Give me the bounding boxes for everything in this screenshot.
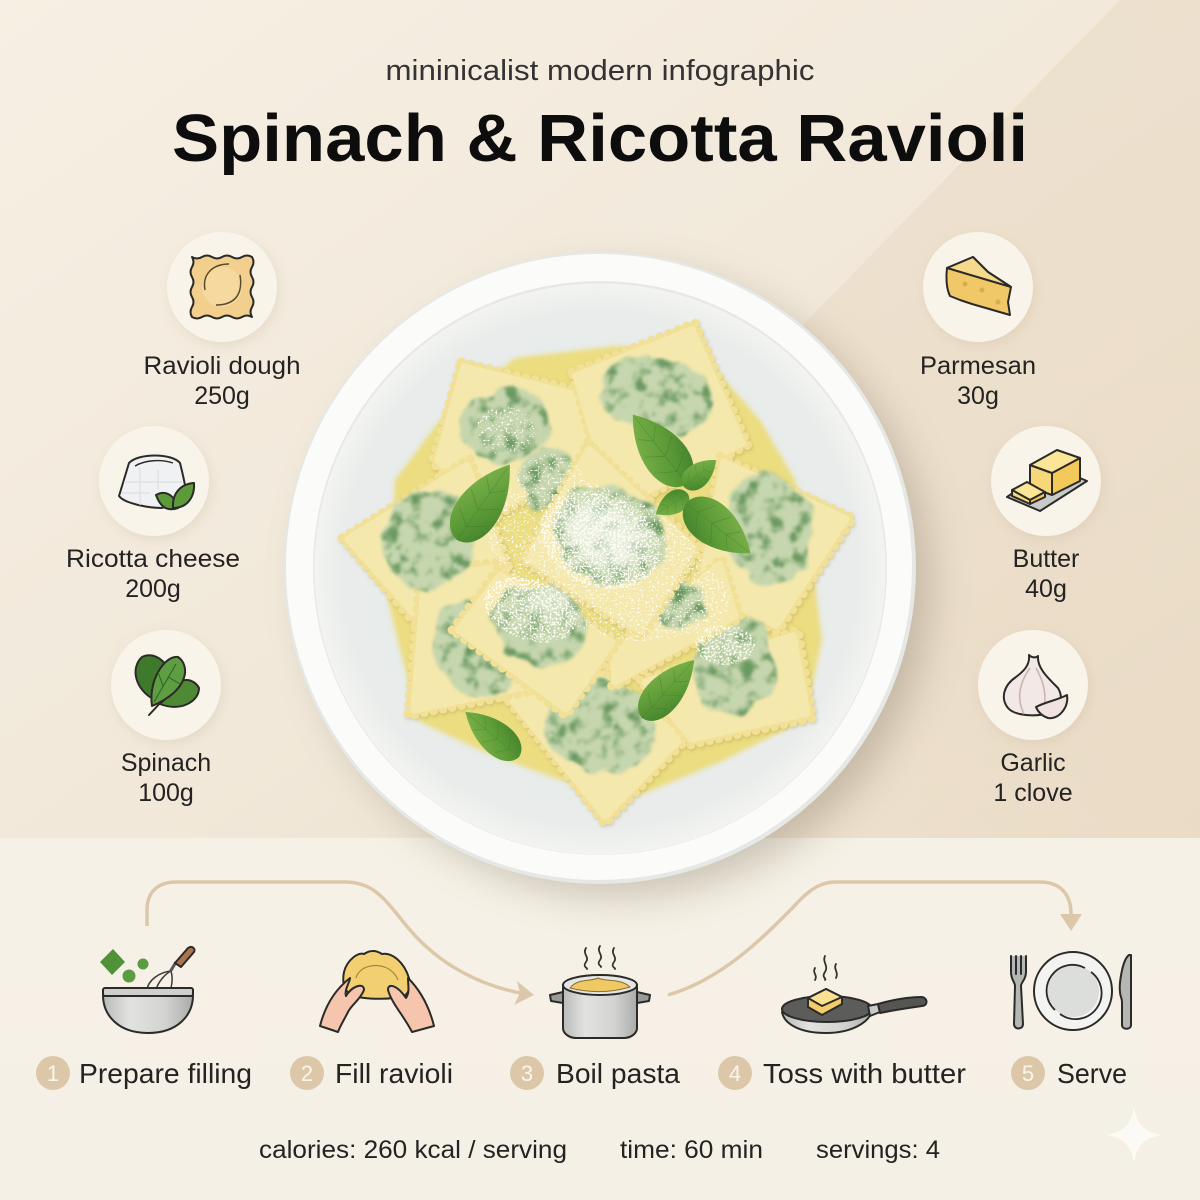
ingredient: butter: 40g [1025,575,1067,603]
step 5: serve [1011,952,1131,1090]
label: prepare filling: Prepare filling [79,1058,252,1089]
badge: 3: 3 [521,1061,533,1086]
icon: bowl and whisk [100,947,195,1033]
label: ravioli dough: Ravioli dough [144,352,300,380]
label: parmesan: Parmesan [920,352,1036,380]
ingredient: garlic [978,630,1088,807]
ingredient: spinach: 100g [138,779,194,807]
badge: 1: 1 [47,1061,59,1086]
badge: 2 [290,1056,324,1090]
icon: pot with steam [550,946,650,1038]
label: butter: Butter [1013,545,1079,573]
icon: garlic bulb [1004,655,1067,718]
label: fill ravioli: Fill ravioli [335,1058,453,1089]
step 4: toss with butter [718,956,966,1090]
ingredient: parmesan [920,232,1036,410]
icon: hands folding dough [320,951,434,1032]
icon: plate fork knife [1011,952,1131,1030]
ingredient: ravioli dough: 250g [194,382,250,410]
ingredient: ricotta cheese: 200g [125,575,181,603]
label: boil pasta: Boil pasta [556,1058,680,1089]
subtitle: mininicalist modern infographic [386,55,814,87]
label: serve: Serve [1057,1058,1127,1089]
ingredient: ravioli dough [144,232,300,410]
footer: time: time: 60 min [620,1136,763,1164]
label: ricotta cheese: Ricotta cheese [66,545,240,573]
badge: 2: 2 [301,1061,313,1086]
icon: sparkle [1106,1107,1162,1163]
arrow: steps 3 to 5 [668,882,1082,995]
badge: 3 [510,1056,544,1090]
label: toss with butter: Toss with butter [763,1058,966,1089]
footer: calories: calories: 260 kcal / serving [259,1136,567,1164]
badge: 4 [718,1056,752,1090]
icon: butter on tray [1007,450,1087,511]
title: Spinach & Ricotta Ravioli [172,101,1028,176]
footer: servings: servings: 4 [816,1136,940,1164]
badge: 1 [36,1056,70,1090]
arrow: steps 1 to 3 [147,882,534,1005]
butter sauce [388,346,822,795]
step 1: prepare filling [36,947,252,1090]
icon: pan with butter [782,956,926,1033]
ingredient: garlic: 1 clove [993,779,1073,807]
badge: 4: 4 [729,1061,741,1086]
step 2: fill ravioli [290,951,453,1090]
ingredient: butter [991,426,1101,603]
ingredient: ricotta cheese [66,426,240,603]
icon: cheese wedge [946,257,1011,315]
label: spinach: Spinach [121,749,211,777]
panel: steps background [0,838,1200,1200]
basil leaves [439,401,764,769]
grated parmesan [462,406,755,674]
plate with ravioli [284,252,930,896]
ingredient: parmesan: 30g [957,382,999,410]
ingredient: spinach [111,630,221,807]
badge: 5: 5 [1022,1061,1034,1086]
icon: ricotta [119,456,194,509]
background [0,0,1200,840]
icon: ravioli square [190,256,254,318]
label: garlic: Garlic [1000,749,1066,777]
step 3: boil pasta [510,946,680,1090]
ravioli pieces [342,323,853,824]
icon: spinach leaves [136,655,199,715]
